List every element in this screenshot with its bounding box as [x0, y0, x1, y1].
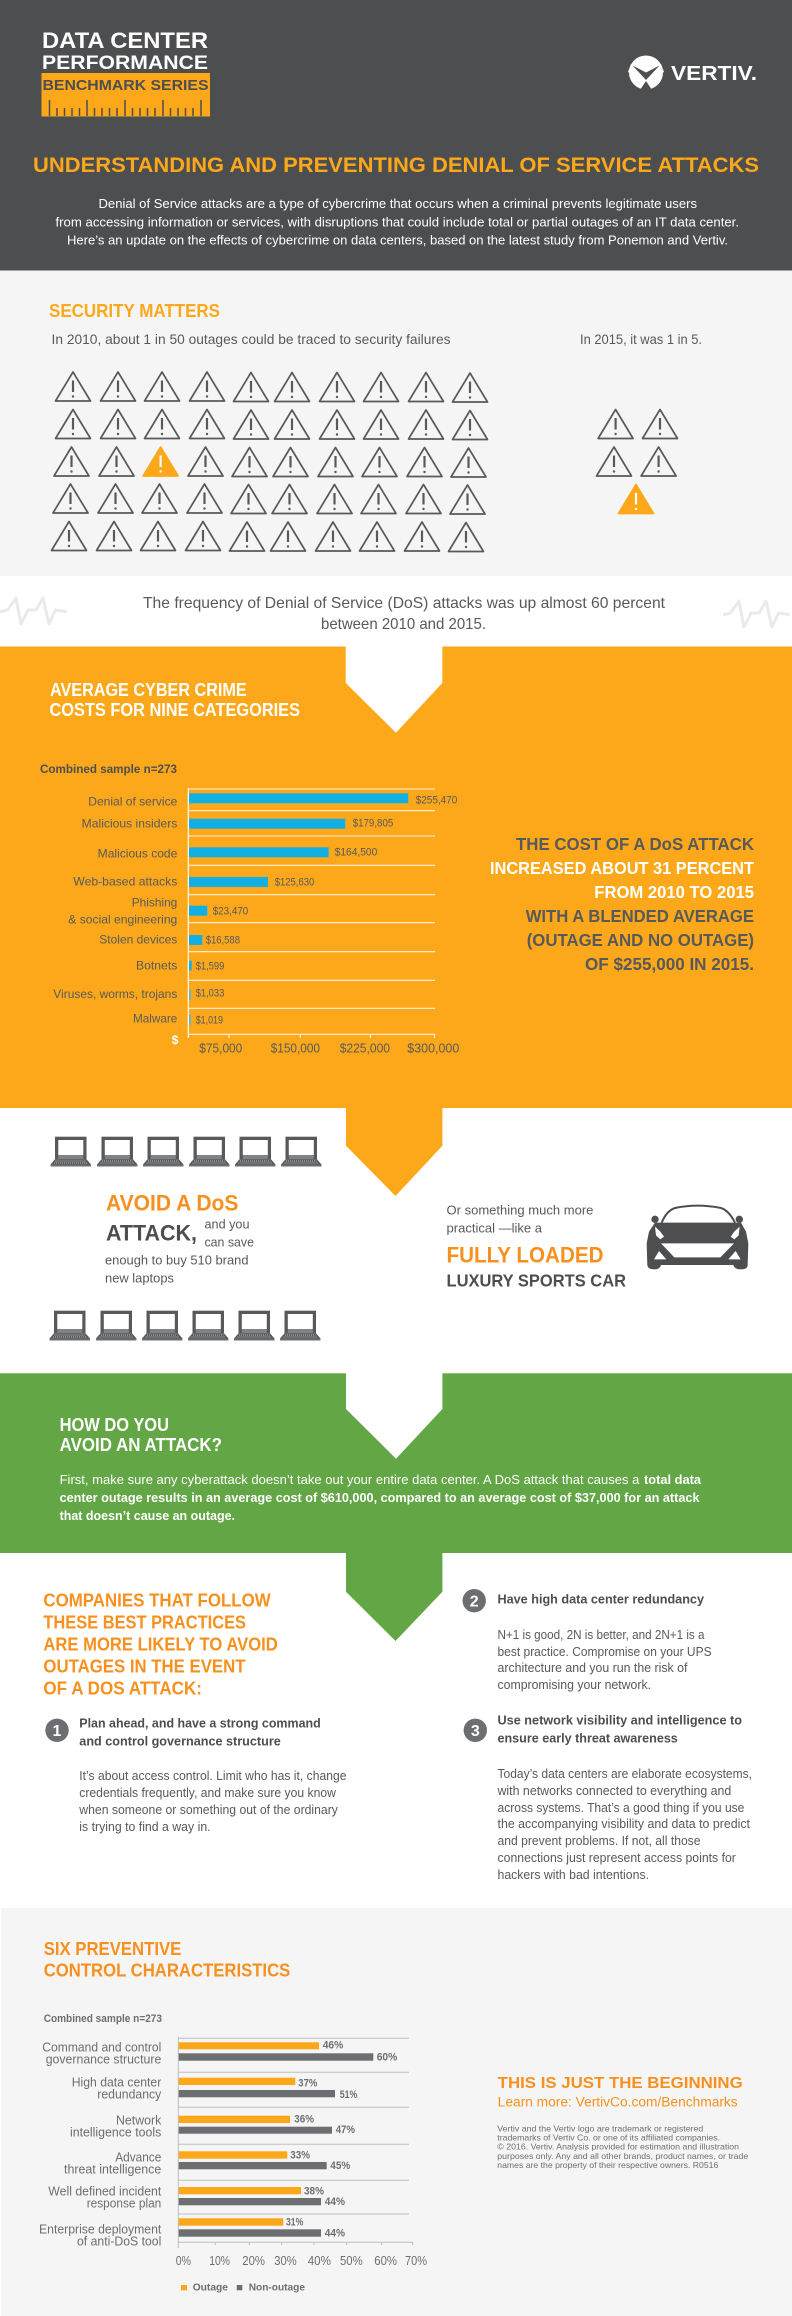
bar chart: outage vs non-outage: 38% [304, 2186, 324, 2198]
bar chart: cost by category: Web-based attacks [73, 874, 177, 888]
intro text: from accessing information or services, with disruptions that could include total or partial outages of an IT data center. [56, 214, 739, 230]
panel: security matters [0, 270, 792, 576]
bar chart: outage vs non-outage: response plan [87, 2196, 161, 2211]
intro text [56, 196, 739, 248]
practice 3: the accompanying visibility and data to predict [498, 1816, 750, 1831]
text: fully loaded luxury sports car: Or something much more [446, 1202, 593, 1217]
text: avoid a DoS attack: AVOID A DoS [106, 1191, 238, 1216]
bar chart: outage vs non-outage: Well defined incident [48, 2184, 162, 2199]
practice 2: architecture and you run the risk of [498, 1660, 688, 1675]
practice 1: It’s about access control. Limit who has it, change [79, 1768, 347, 1783]
bar chart: cost by category: $150,000 [271, 1040, 320, 1055]
bar chart: cost by category: Viruses, worms, trojans [53, 987, 177, 1001]
heading: companies that follow best practices: OF A DOS ATTACK: [43, 1678, 202, 1699]
bar chart: outage vs non-outage: 51% [340, 2089, 357, 2101]
legend: Non-outage [249, 2282, 305, 2294]
heading: companies that follow best practices: THESE BEST PRACTICES [43, 1612, 246, 1633]
heading: average cyber crime costs: COSTS FOR NINE CATEGORIES [50, 700, 300, 720]
practice 1: is trying to find a way in. [79, 1819, 211, 1834]
heading: companies that follow best practices: COMPANIES THAT FOLLOW [43, 1590, 271, 1611]
heading: security matters: SECURITY MATTERS [49, 301, 220, 321]
bar chart: outage vs non-outage: Enterprise deployment [39, 2222, 162, 2237]
panel: six preventive control characteristics [1, 1908, 792, 2316]
bar chart: cost by category: $75,000 [199, 1040, 242, 1055]
heading: average cyber crime costs: AVERAGE CYBER CRIME [50, 680, 247, 700]
practice 3: 3 [471, 1723, 480, 1740]
icon grid: 1 in 50 warning triangles [52, 372, 488, 552]
bar chart: outage vs non-outage: High data center [72, 2075, 162, 2090]
legend [181, 2282, 305, 2294]
legal text [497, 2124, 749, 2170]
text: avoid a DoS attack: and you [204, 1217, 250, 1232]
callout: cost of a DoS attack: (OUTAGE AND NO OUTAGE) [527, 930, 754, 950]
practice 1: Plan ahead, and have a strong command [79, 1716, 321, 1731]
call to action: THIS IS JUST THE BEGINNING [498, 2075, 743, 2092]
call to action [498, 2075, 743, 2110]
practice 2: N+1 is good, 2N is better, and 2N+1 is a [498, 1627, 705, 1642]
bar chart: cost by category: Stolen devices [99, 932, 177, 946]
practice 2 [462, 1589, 712, 1692]
practice 3: across systems. That’s a good thing if you use [498, 1800, 744, 1815]
bar chart: outage vs non-outage: 33% [290, 2150, 310, 2162]
bar chart: outage vs non-outage [39, 2013, 427, 2268]
panel: what the savings could buy [0, 1108, 792, 1374]
legend: Outage [193, 2282, 228, 2294]
text: fully loaded luxury sports car: practical —like a [446, 1220, 543, 1235]
legal text: © 2016. Vertiv. Analysis provided for estimation and illustration [497, 2142, 739, 2152]
icon row: laptops top [50, 1137, 322, 1166]
bar chart: outage vs non-outage: 47% [336, 2124, 355, 2136]
bar chart: cost by category: Malicious code [98, 846, 178, 860]
bar chart: outage vs non-outage: intelligence tools [70, 2125, 162, 2140]
bar chart: cost by category [40, 762, 459, 1055]
panel: best practices [0, 1553, 792, 1908]
series badge: data center performance benchmark series: BENCHMARK SERIES [42, 77, 208, 94]
intro text: Denial of Service attacks are a type of cybercrime that occurs when a criminal prevents legitimate users [98, 196, 697, 211]
bar chart: outage vs non-outage: threat intelligence [64, 2162, 161, 2177]
bar chart: cost by category: $255,470 [416, 794, 457, 806]
logo: Vertiv: VERTIV. [671, 63, 757, 85]
series badge: data center performance benchmark series: DATA CENTER [42, 28, 208, 53]
bar chart: outage vs non-outage: Command and control [42, 2039, 161, 2054]
practice 3: Today’s data centers are elaborate ecosystems, [498, 1766, 752, 1781]
practice 2: compromising your network. [498, 1677, 651, 1692]
bar chart: outage vs non-outage: of anti-DoS tool [77, 2234, 161, 2249]
text: 2010 statistic: In 2010, about 1 in 50 outages could be traced to security failures [52, 331, 450, 347]
bar chart: cost by category: $1,033 [196, 988, 224, 1000]
bar chart: cost by category: $225,000 [340, 1040, 390, 1055]
heading: six preventive control characteristics: CONTROL CHARACTERISTICS [44, 1961, 290, 1981]
intro text: Here’s an update on the effects of cybercrime on data centers, based on the latest study from Ponemon and Vertiv. [67, 233, 728, 248]
practice 2: Have high data center redundancy [498, 1592, 705, 1607]
text: 2015 statistic: In 2015, it was 1 in 5. [580, 331, 702, 347]
panel: frequency statement [0, 576, 792, 646]
bar chart: cost by category: Malware [133, 1011, 178, 1025]
practice 1: and control governance structure [79, 1734, 281, 1749]
bar chart: outage vs non-outage: 45% [330, 2160, 350, 2172]
text: fully loaded luxury sports car: FULLY LOADED [446, 1242, 604, 1267]
bar chart: cost by category: & social engineering [68, 912, 177, 926]
bar chart: cost by category: $23,470 [213, 905, 248, 917]
heading: how do you avoid an attack: HOW DO YOU [60, 1415, 169, 1435]
bar chart: cost by category: Botnets [136, 958, 177, 972]
bar chart: outage vs non-outage: governance structure [46, 2051, 161, 2066]
bar chart: outage vs non-outage: 44% [325, 2228, 345, 2240]
bar chart: cost by category: $125,630 [275, 876, 314, 888]
heading: how do you avoid an attack [60, 1415, 222, 1455]
bar chart: cost by category: $1,019 [196, 1014, 223, 1026]
heading: how do you avoid an attack: AVOID AN ATTACK? [60, 1435, 222, 1455]
practice 1: credentials frequently, and make sure you know [79, 1785, 336, 1800]
practice 2: 2 [470, 1594, 479, 1610]
text: outage costs [60, 1472, 702, 1523]
bar chart: outage vs non-outage: 70% [405, 2254, 427, 2268]
practice 1: 1 [53, 1723, 62, 1740]
text: avoid a DoS attack: enough to buy 510 brand [105, 1253, 248, 1268]
bar chart: outage vs non-outage: 50% [340, 2254, 363, 2268]
arrow: green down [346, 1553, 442, 1641]
arrow: white notch [346, 1373, 442, 1459]
callout: cost of a DoS attack [490, 834, 754, 974]
text: frequency of DoS attacks [143, 595, 666, 633]
heading: companies that follow best practices: OUTAGES IN THE EVENT [43, 1656, 246, 1677]
text: outage costs: that doesn’t cause an outage. [60, 1508, 235, 1523]
arrow: orange down [346, 1108, 442, 1196]
text: frequency of DoS attacks: between 2010 and 2015. [321, 616, 486, 633]
heading: companies that follow best practices: ARE MORE LIKELY TO AVOID [43, 1634, 278, 1655]
bar chart: outage vs non-outage: 20% [242, 2254, 265, 2268]
bar chart: outage vs non-outage: 37% [298, 2078, 317, 2090]
bar chart: cost by category: $1,599 [196, 960, 224, 972]
practice 3: and prevent problems. If not, all those [498, 1833, 700, 1848]
bar chart: outage vs non-outage: 36% [294, 2114, 314, 2126]
practice 1: when someone or something out of the ordinary [78, 1802, 338, 1817]
icon grid: 1 in 5 warning triangles [596, 410, 678, 514]
text: outage costs: total data [644, 1472, 702, 1487]
callout: cost of a DoS attack: WITH A BLENDED AVERAGE [526, 906, 754, 926]
bar chart: outage vs non-outage: Advance [115, 2150, 161, 2165]
practice 3: hackers with bad intentions. [498, 1867, 649, 1882]
bar chart: outage vs non-outage: redundancy [97, 2087, 162, 2102]
panel: how do you avoid an attack [0, 1373, 792, 1553]
callout: cost of a DoS attack: FROM 2010 TO 2015 [594, 882, 754, 902]
text: avoid a DoS attack: new laptops [105, 1271, 174, 1286]
bar chart: cost by category: Denial of service [88, 794, 178, 808]
practice 1 [45, 1716, 347, 1834]
series badge: data center performance benchmark series [42, 28, 210, 116]
callout: cost of a DoS attack: INCREASED ABOUT 31 PERCENT [490, 858, 754, 878]
text: outage costs: center outage results in an average cost of $610,000, compared to an average cost of $37,000 for an attack [60, 1490, 700, 1505]
bar chart: cost by category: $16,588 [206, 934, 240, 946]
bar chart: outage vs non-outage: 60% [374, 2254, 397, 2268]
callout: cost of a DoS attack: THE COST OF A DoS ATTACK [516, 834, 754, 854]
practice 3: with networks connected to everything and [497, 1783, 731, 1798]
heading: six preventive control characteristics: SIX PREVENTIVE [44, 1939, 181, 1959]
text: avoid a DoS attack: can save [204, 1235, 254, 1250]
heading: six preventive control characteristics [44, 1939, 290, 1981]
bar chart: outage vs non-outage: 10% [209, 2254, 230, 2268]
text: frequency of DoS attacks: The frequency of Denial of Service (DoS) attacks was up almost 60 percent [143, 595, 666, 612]
bar chart: outage vs non-outage: 46% [323, 2040, 343, 2052]
panel: average cyber crime costs [0, 646, 792, 1108]
call to action: Learn more: VertivCo.com/Benchmarks [498, 2095, 738, 2110]
bar chart: cost by category: $164,500 [335, 846, 377, 858]
title: UNDERSTANDING AND PREVENTING DENIAL OF SERVICE ATTACKS [33, 154, 759, 177]
practice 3: connections just represent access points for [498, 1850, 737, 1865]
text: fully loaded luxury sports car: LUXURY SPORTS CAR [446, 1271, 626, 1291]
bar chart: cost by category: Malicious insiders [82, 816, 177, 830]
bar chart: outage vs non-outage: 44% [325, 2196, 345, 2208]
bar chart: cost by category: Combined sample n=273 [40, 762, 177, 776]
icon: sports car [647, 1206, 748, 1269]
bar chart: cost by category: $179,805 [353, 818, 393, 830]
bar chart: outage vs non-outage: 60% [377, 2052, 397, 2064]
logo: Vertiv [628, 56, 757, 90]
legal text: purposes only. Any and all other brands, product names, or trade [497, 2151, 749, 2161]
arrow: white notch [346, 646, 442, 733]
practice 3 [464, 1713, 752, 1882]
bar chart: cost by category: $ [172, 1033, 179, 1047]
bar chart: outage vs non-outage: 30% [274, 2254, 297, 2268]
bar chart: outage vs non-outage: 0% [176, 2254, 191, 2268]
legal text: names are the property of their respective owners. R0516 [497, 2160, 719, 2170]
practice 3: ensure early threat awareness [498, 1731, 678, 1746]
icon: heartbeat left [0, 598, 67, 624]
legal text: trademarks of Vertiv Co. or one of its affiliated companies. [497, 2133, 720, 2143]
icon row: laptops bottom [50, 1311, 320, 1340]
practice 3: Use network visibility and intelligence to [498, 1713, 742, 1728]
heading: companies that follow best practices [43, 1590, 278, 1699]
icon: heartbeat right [723, 601, 790, 627]
legal text: Vertiv and the Vertiv logo are trademark or registered [497, 2124, 704, 2134]
text: outage costs: First, make sure any cyberattack doesn’t take out your entire data center. A DoS attack that causes a [60, 1472, 640, 1487]
text: fully loaded luxury sports car [446, 1202, 626, 1291]
bar chart: cost by category: $300,000 [407, 1040, 459, 1055]
bar chart: outage vs non-outage: Combined sample n=273 [44, 2013, 162, 2025]
bar chart: cost by category: Phishing [132, 896, 177, 910]
series badge: data center performance benchmark series: PERFORMANCE [42, 52, 208, 74]
heading: average cyber crime costs [50, 680, 300, 720]
bar chart: outage vs non-outage: Network [116, 2113, 162, 2128]
bar chart: outage vs non-outage: 31% [286, 2217, 303, 2229]
bar chart: outage vs non-outage: 40% [308, 2254, 331, 2268]
text: avoid a DoS attack [105, 1191, 254, 1286]
callout: cost of a DoS attack: OF $255,000 IN 2015. [585, 954, 754, 974]
text: avoid a DoS attack: ATTACK, [106, 1221, 197, 1246]
panel: header [0, 0, 792, 270]
practice 2: best practice. Compromise on your UPS [498, 1644, 712, 1659]
